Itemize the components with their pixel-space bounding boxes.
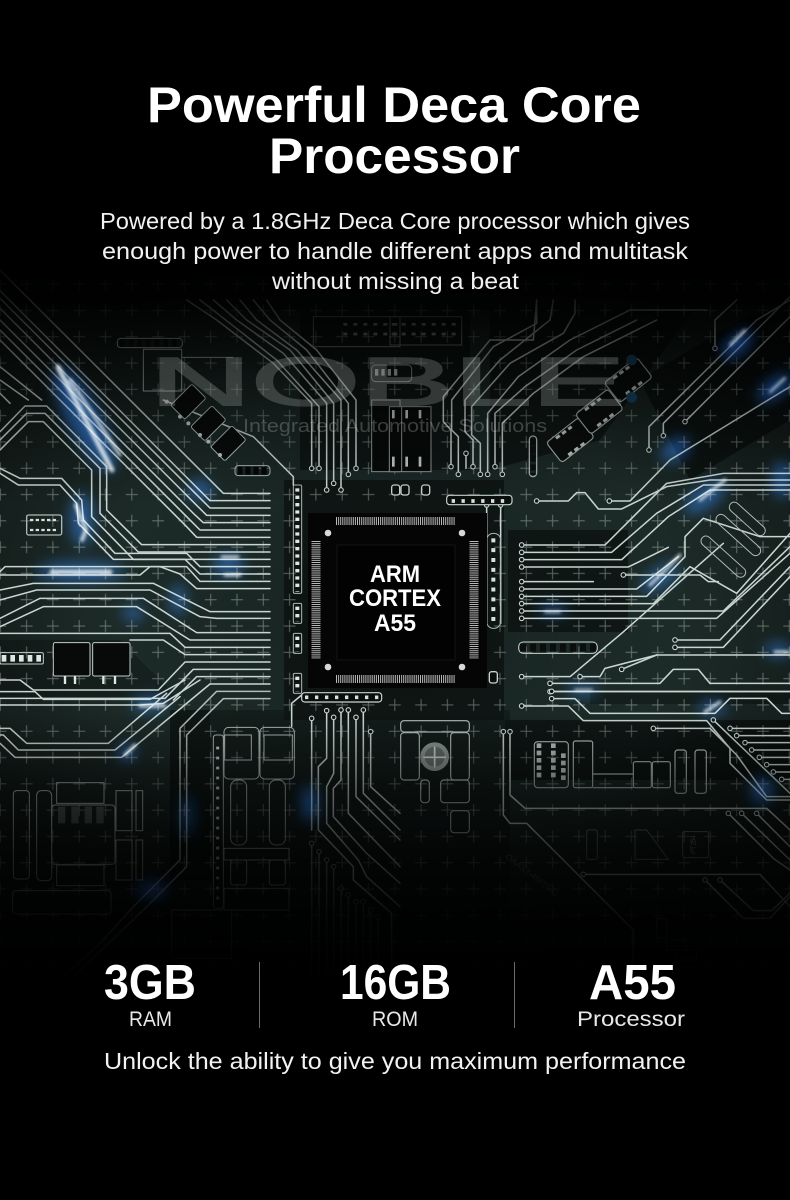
- centre-bottom traces: [312, 710, 400, 980]
- stat: ROM: ROM: [372, 1008, 418, 1031]
- right pins: [470, 541, 478, 659]
- board substrate: [0, 240, 790, 1000]
- upper centre traces: [443, 297, 790, 623]
- stat: RAM: [104, 956, 196, 1031]
- soft glow halos: [36, 327, 790, 898]
- stat: processor: Processor: [577, 1008, 685, 1031]
- lower left component cluster: [13, 727, 294, 958]
- stat: ROM: [340, 956, 451, 1031]
- chip label: ARM: [370, 561, 420, 588]
- PT 254 marking: PT 254: [689, 835, 698, 854]
- divider: [259, 962, 260, 1028]
- intro paragraph: without missing a beat: [271, 268, 520, 294]
- lower left traces: [0, 680, 302, 980]
- intro paragraph: [100, 208, 690, 294]
- circuit board artwork: [0, 240, 790, 1000]
- processor chip: [308, 513, 487, 688]
- closing line: Unlock the ability to give you maximum performance: [104, 1048, 686, 1074]
- electric blue glow: [36, 327, 790, 898]
- memory modules upper centre: [313, 317, 412, 472]
- title: Powerful Deca Core: [147, 77, 641, 133]
- watermark tagline: Integrated Automotive Solutions: [243, 416, 547, 436]
- bright light streaks: [52, 330, 788, 755]
- upper centre IC pair: [389, 317, 462, 495]
- top pins: [336, 517, 455, 525]
- chip label: CORTEX: [349, 585, 441, 612]
- bottom fade to black: [0, 715, 790, 1000]
- regulator packages left: [0, 643, 130, 684]
- NOBLE watermark logo: [150, 344, 625, 436]
- corner markers: [325, 530, 465, 670]
- serpentine pill traces: [699, 500, 767, 579]
- grid of plus marks: [0, 280, 790, 1000]
- stat: processor: A55: [589, 956, 676, 1010]
- right circuit traces: [522, 387, 790, 692]
- part label text: OAAS2-45K(SA): [504, 852, 561, 898]
- inner die outline: [337, 545, 455, 660]
- stat: processor: [577, 956, 685, 1031]
- top fade to black: [0, 240, 790, 500]
- left pins: [312, 541, 320, 659]
- vertical pad stack right of chip top: [529, 436, 537, 477]
- title: [147, 77, 641, 184]
- intro paragraph: enough power to handle different apps and multitask: [102, 238, 689, 264]
- diagonal transistor components: [165, 384, 246, 461]
- NOBLE watermark logo: NOBLE: [150, 344, 625, 420]
- pad strip above chip: [447, 495, 597, 683]
- bottom pins: [336, 675, 455, 683]
- surface mount components left: [27, 338, 302, 693]
- pad strip below chip: [302, 693, 382, 702]
- chip label: A55: [374, 610, 416, 637]
- capacitor and pads: [401, 721, 709, 960]
- stat: RAM: 3GB: [104, 956, 196, 1010]
- stat: RAM: RAM: [129, 1008, 172, 1031]
- title: Processor: [269, 128, 520, 184]
- intro paragraph: Powered by a 1.8GHz Deca Core processor which gives: [100, 208, 690, 234]
- stat: ROM: 16GB: [340, 956, 451, 1010]
- lower right traces: [503, 691, 790, 980]
- centre traces above chip left: [187, 300, 356, 490]
- chip label: [349, 561, 441, 637]
- diagonal RAM chips: [546, 355, 652, 463]
- divider: [514, 962, 515, 1028]
- chip body: [308, 513, 487, 688]
- darker board regions: [0, 240, 790, 940]
- left circuit traces: [0, 270, 293, 700]
